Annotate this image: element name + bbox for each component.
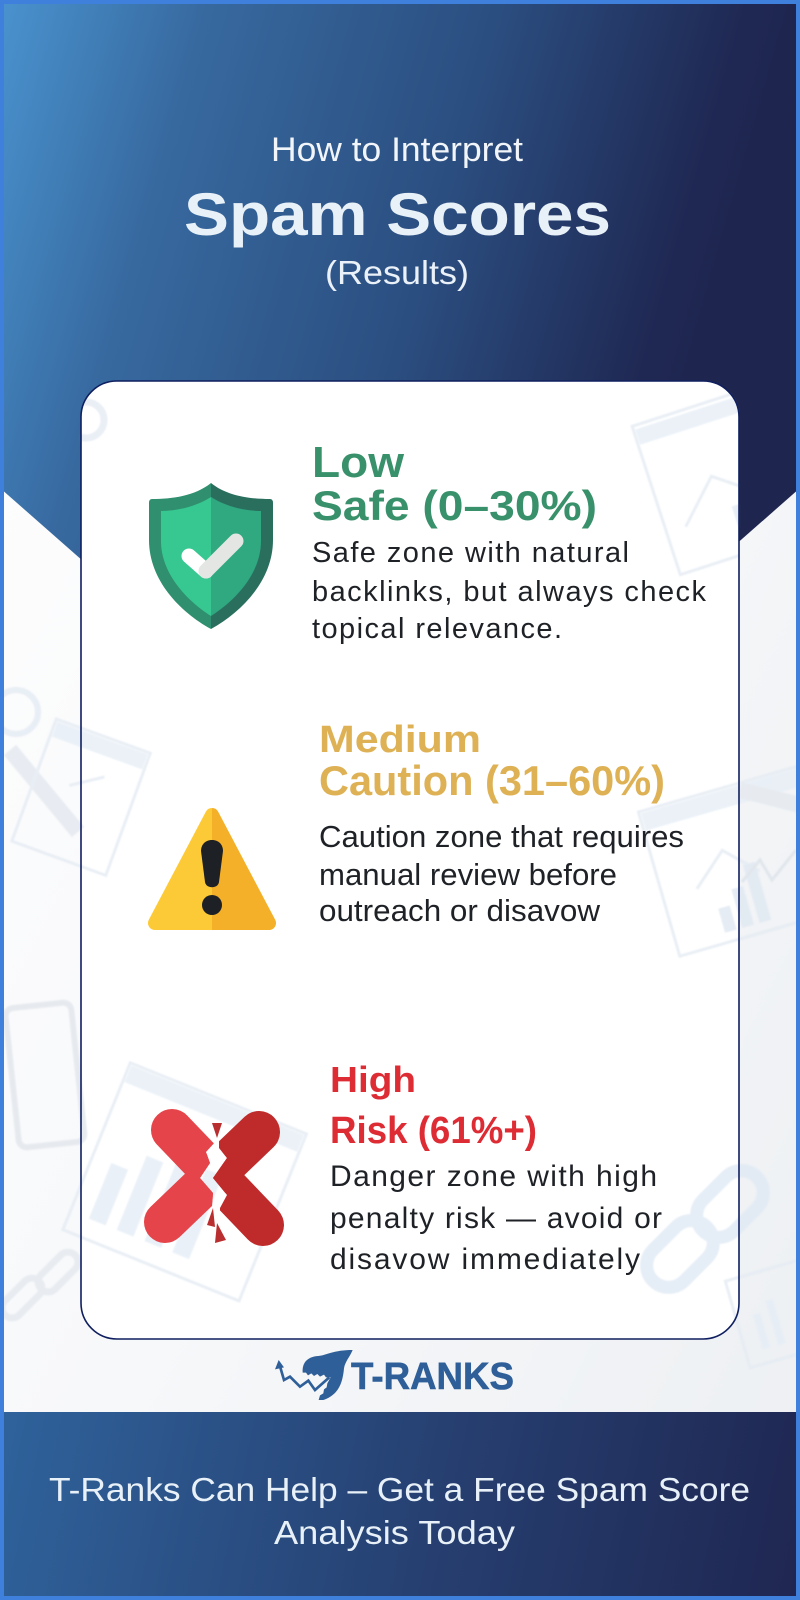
icon: dinosaur head with rising arrow: [275, 1350, 353, 1400]
heading: risk range: Risk (61%+): [330, 1110, 537, 1152]
description: low: Safe zone with natural: [312, 537, 629, 569]
header chevron background: [0, 0, 800, 840]
title: spam scores: Spam Scores: [184, 181, 611, 248]
watermark icons: [0, 392, 800, 1368]
footer text: T-Ranks Can Help – Get a Free Spam Score: [49, 1471, 750, 1508]
description: medium: outreach or disavow: [319, 893, 601, 928]
logo: t-ranks: [275, 1350, 514, 1400]
description: high: penalty risk — avoid or: [330, 1202, 662, 1235]
description: medium: Caution zone that requires: [319, 819, 684, 854]
footer text: Analysis Today: [274, 1514, 516, 1551]
heading: medium: Medium: [319, 719, 481, 761]
description: low: [312, 537, 706, 645]
footer banner: [0, 1412, 800, 1600]
medium risk section: [155, 719, 684, 928]
watermark: browser lower right: [725, 1256, 800, 1368]
heading: safe range: Safe (0–30%): [312, 482, 597, 529]
description: low: topical relevance.: [312, 613, 562, 645]
wordmark: T-RANKS: [351, 1356, 514, 1398]
watermark: chain lower left: [0, 1248, 82, 1322]
watermark: chain lower right: [638, 1162, 772, 1296]
watermark: right edge panel: [740, 790, 800, 882]
icon: broken red x: [165, 1123, 263, 1243]
card outline: [81, 381, 739, 1339]
low risk section: [149, 438, 706, 645]
high risk section: [165, 1059, 662, 1276]
footer text: [49, 1471, 750, 1551]
title line: results: (Results): [325, 254, 469, 291]
watermark: tablet lower left: [5, 1002, 85, 1148]
description: high: [330, 1160, 662, 1276]
heading: high: High: [330, 1059, 416, 1100]
watermark: top card magnifier and browser: [68, 392, 787, 575]
description: medium: [319, 819, 684, 928]
heading: low: Low: [312, 438, 405, 487]
description: high: Danger zone with high: [330, 1160, 657, 1193]
title block: [184, 131, 611, 291]
heading: caution range: Caution (31–60%): [319, 757, 665, 804]
description: medium: manual review before: [319, 857, 617, 892]
description: low: backlinks, but always check: [312, 576, 706, 608]
watermark: browser left middle: [12, 719, 150, 875]
description: high: disavow immediately: [330, 1243, 640, 1276]
icon: warning triangle: [155, 815, 269, 923]
watermark: browser with bars lower left: [63, 1063, 306, 1301]
watermark: browser right middle: [638, 765, 800, 956]
icon: green shield with check: [149, 483, 273, 629]
watermark: magnifier and chain left: [0, 690, 78, 832]
main white card: [81, 381, 739, 1339]
title line: how to interpret: How to Interpret: [271, 131, 524, 169]
